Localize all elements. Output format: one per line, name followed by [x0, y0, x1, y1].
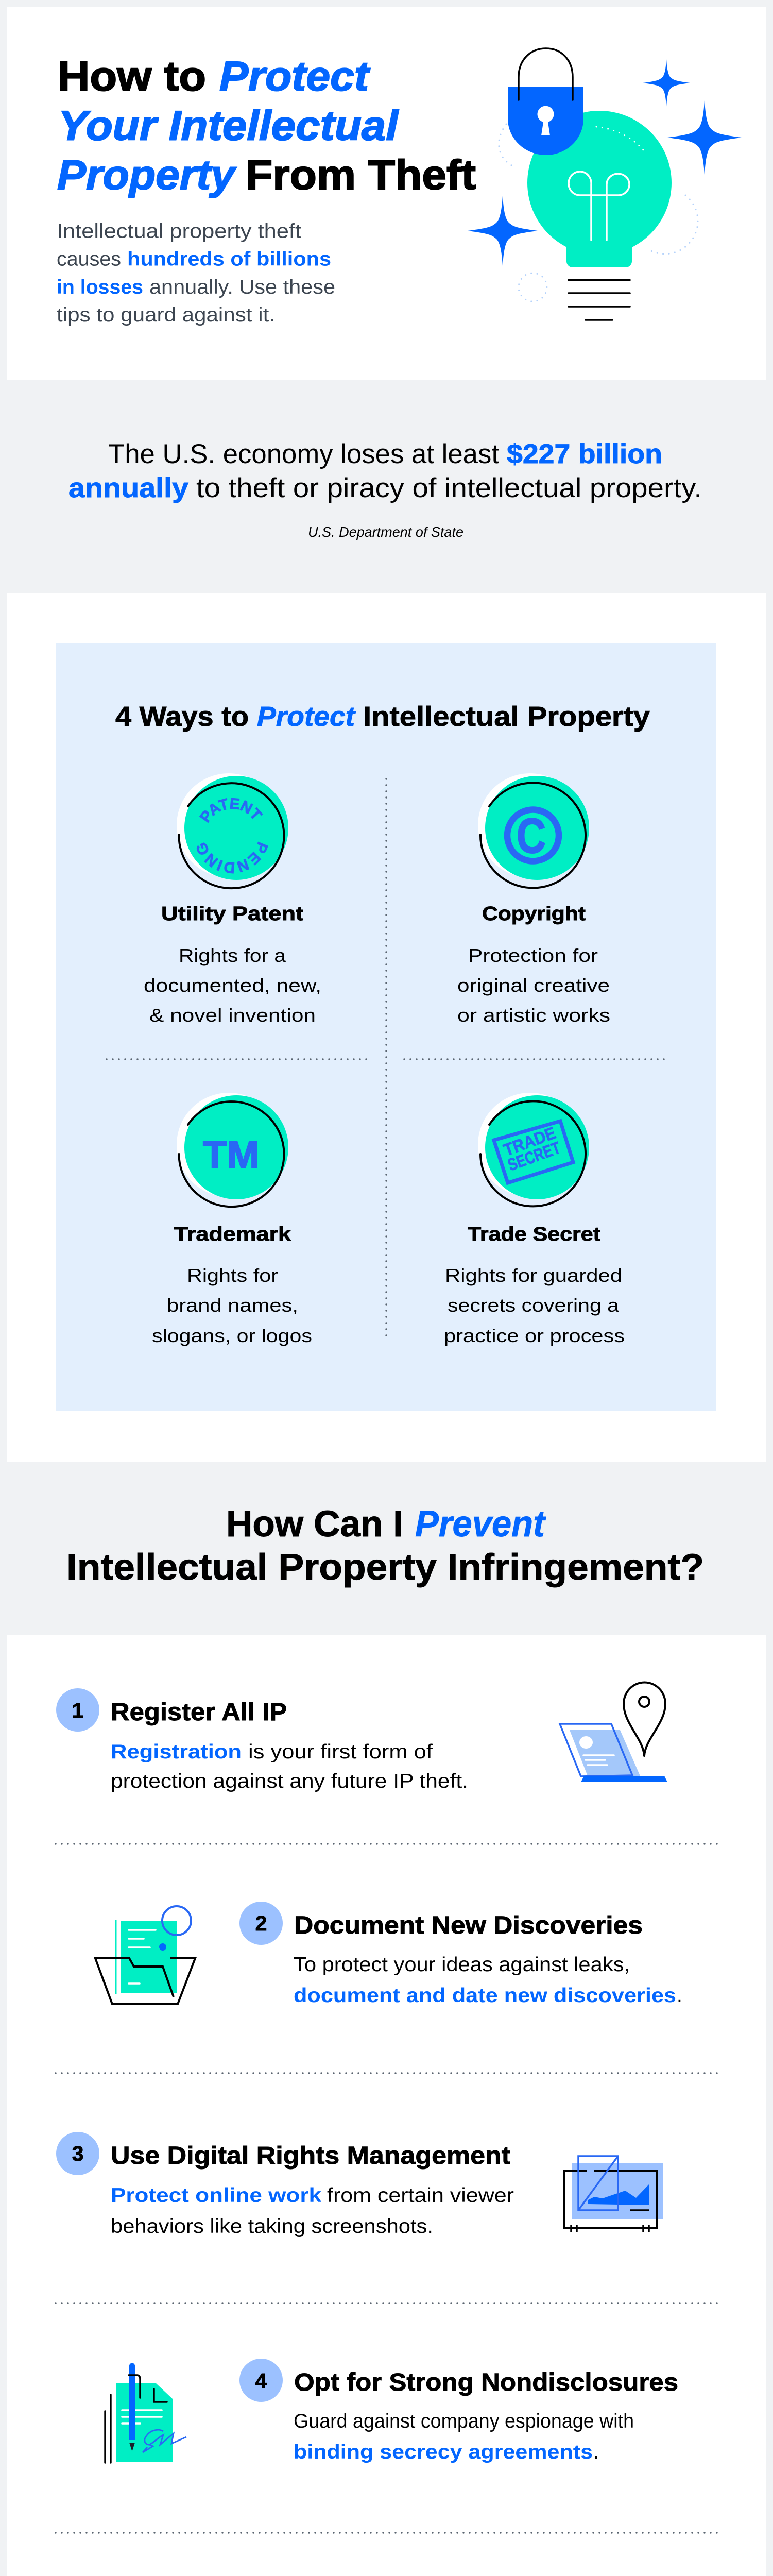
statistic callout: to theft or piracy of intellectual property.: [196, 473, 702, 503]
description: [144, 945, 321, 1026]
heading: prevent: Intellectual Property Infringement?: [66, 1547, 704, 1588]
card: trade secret: [444, 1093, 625, 1346]
icon: patent pending seal: PENDING: [197, 842, 268, 874]
step 1: register: 1: [72, 1699, 83, 1722]
card: trade secret: Trade Secret: [468, 1224, 600, 1245]
title: Protect: [219, 54, 370, 100]
step 4 text: Guard against company espionage with: [294, 2410, 634, 2432]
heading: prevent: How Can I: [226, 1504, 403, 1545]
card: utility patent: [144, 773, 321, 1026]
heading: prevent: Prevent: [415, 1504, 546, 1545]
description: [444, 1265, 625, 1346]
description: practice or process: [444, 1325, 625, 1346]
statistic callout: $227 billion: [507, 439, 662, 469]
heading: 4 ways: 4 Ways to: [115, 701, 249, 732]
icon: document in folder: [95, 1906, 195, 2004]
description: documented, new,: [144, 975, 321, 996]
step 2 text: [294, 1954, 682, 2007]
title: Property: [57, 152, 237, 198]
step 3: digital rights: [56, 2132, 663, 2238]
intro text: Intellectual property theft: [57, 221, 301, 242]
step 1 text: Registration: [111, 1741, 242, 1763]
description: or artistic works: [457, 1005, 610, 1026]
panel: hero: [7, 7, 766, 380]
step 4 text: [294, 2410, 634, 2463]
step 1 text: is your first form of: [248, 1741, 433, 1763]
card: copyright: Copyright: [482, 903, 586, 925]
intro text: in losses: [57, 276, 143, 298]
description: slogans, or logos: [152, 1325, 312, 1346]
statistic callout: [68, 439, 702, 540]
icon: copyright seal: [478, 773, 589, 888]
description: Rights for: [187, 1265, 278, 1286]
step 4: nondisclosures: Opt for Strong Nondisclosures: [294, 2369, 678, 2396]
step 2: document: 2: [255, 1911, 267, 1935]
description: Protection for: [468, 945, 598, 966]
step 3 text: behaviors like taking screenshots.: [111, 2215, 433, 2238]
title: How to: [58, 54, 206, 100]
icon: trade secret stamp: SECRET: [505, 1138, 563, 1175]
icon: trademark seal: [177, 1093, 288, 1207]
icon: light bulb and padlock: [468, 48, 742, 320]
intro text: [57, 221, 335, 326]
card: trademark: [152, 1093, 312, 1346]
step 1 text: protection against any future IP theft.: [111, 1770, 468, 1792]
statistic callout: annually: [68, 473, 189, 503]
icon: trade secret stamp: TRADE: [501, 1123, 558, 1160]
icon: protected screen chart: [564, 2156, 663, 2232]
intro text: tips to guard against it.: [57, 304, 275, 326]
source: U.S. Department of State: [308, 524, 463, 540]
step 4 text: binding secrecy agreements: [294, 2441, 593, 2463]
icon: copyright seal: C: [517, 808, 546, 863]
intro text: annually. Use these: [149, 276, 335, 298]
icon: laptop and map pin: [560, 1682, 667, 1782]
step 4 text: .: [593, 2441, 599, 2463]
heading: 4 ways: [115, 701, 650, 732]
description: & novel invention: [149, 1005, 316, 1026]
step 2 text: document and date new discoveries: [294, 1985, 676, 2007]
step 2: document: [95, 1902, 682, 2007]
step 3: digital rights: 3: [72, 2142, 83, 2165]
title: From Theft: [246, 152, 476, 198]
step 1: register: [56, 1682, 667, 1792]
icon: trademark seal: TM: [203, 1133, 260, 1176]
step 1: register: Register All IP: [111, 1699, 287, 1726]
description: Rights for a: [179, 945, 286, 966]
step 3: digital rights: Use Digital Rights Management: [111, 2142, 510, 2170]
description: brand names,: [167, 1295, 298, 1316]
icon: patent pending seal: PATENT: [199, 798, 263, 823]
intro text: hundreds of billions: [127, 248, 331, 270]
icon: patent pending seal: [177, 773, 288, 889]
description: [152, 1265, 312, 1346]
step 4: nondisclosures: [105, 2359, 678, 2463]
description: [457, 945, 610, 1026]
title: [57, 54, 476, 198]
step 3 text: from certain viewer: [327, 2184, 514, 2207]
panel: prevention steps: [7, 1635, 766, 2576]
step 1 text: [111, 1741, 468, 1792]
intro text: causes: [57, 248, 121, 270]
statistic callout: The U.S. economy loses at least: [108, 439, 499, 469]
icon: trade secret stamp: [478, 1093, 589, 1206]
heading: 4 ways: Intellectual Property: [363, 701, 650, 732]
description: Rights for guarded: [445, 1265, 622, 1286]
step 3 text: [111, 2184, 514, 2238]
title: Your Intellectual: [58, 103, 399, 149]
step 4: nondisclosures: 4: [255, 2369, 267, 2393]
panel: 4 ways: [7, 593, 766, 1462]
description: secrets covering a: [448, 1295, 620, 1316]
card: copyright: [457, 773, 610, 1026]
card: trademark: Trademark: [174, 1224, 291, 1245]
card: utility patent: Utility Patent: [161, 903, 303, 925]
step 2 text: To protect your ideas against leaks,: [294, 1954, 630, 1976]
description: original creative: [457, 975, 610, 996]
step 3 text: Protect online work: [111, 2184, 321, 2207]
step 2: document: Document New Discoveries: [294, 1912, 643, 1939]
step 2 text: .: [677, 1985, 682, 2007]
heading: prevent: [66, 1504, 704, 1588]
heading: 4 ways: Protect: [257, 701, 356, 732]
icon: signed document and pen: [105, 2363, 186, 2463]
